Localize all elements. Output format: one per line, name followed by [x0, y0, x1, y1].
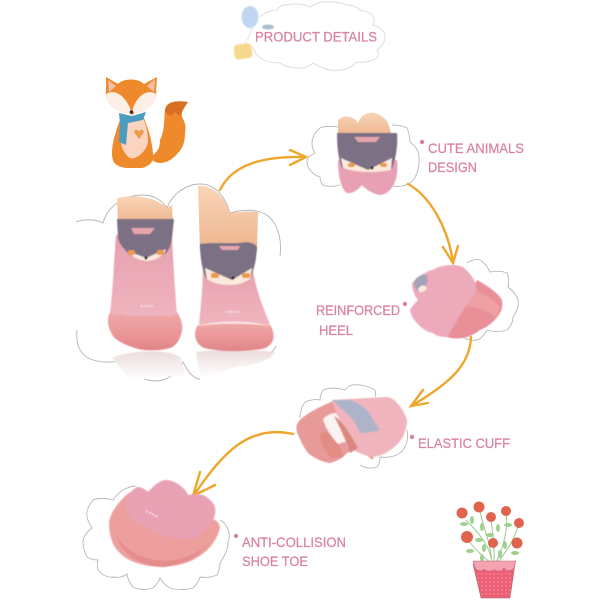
flowers	[456, 502, 524, 548]
bullet	[420, 140, 424, 144]
label text: REINFORCED	[316, 302, 400, 318]
right sock cuff	[200, 242, 257, 284]
bullet	[410, 435, 414, 439]
cute animals leg	[338, 113, 392, 136]
heel grey cuff tip	[414, 275, 428, 292]
label text: ANTI-COLLISION	[242, 534, 346, 550]
fox head	[106, 77, 157, 115]
icon: flower pot	[456, 502, 524, 598]
callout: elastic cuff	[410, 435, 510, 451]
callout: cute animals design: DESIGN	[428, 159, 477, 175]
right sole	[195, 322, 274, 351]
left sole	[108, 312, 182, 350]
arrow: cute animals to heel	[408, 184, 458, 263]
flower pot body	[473, 564, 515, 598]
left sock	[110, 235, 177, 316]
toe cloud outline	[83, 486, 229, 590]
label text: CUTE ANIMALS	[428, 140, 524, 156]
cute animals cloud outline	[307, 125, 419, 186]
toe rubber cap	[109, 480, 220, 567]
icon: balloon and gift	[233, 6, 274, 60]
fox heart	[134, 130, 144, 139]
panel: main photo cloud with both shoes	[76, 184, 280, 381]
label text: ELASTIC CUFF	[418, 435, 510, 451]
callout: reinforced heel: HEEL	[319, 322, 353, 338]
cute animals sock	[337, 133, 397, 195]
right leg	[198, 186, 258, 250]
cuff shoe	[296, 397, 407, 463]
left shoe	[108, 219, 182, 350]
reflections	[112, 350, 275, 380]
cuff fabric	[332, 397, 407, 457]
left sock cuff	[117, 219, 174, 260]
heel fabric	[410, 265, 477, 337]
heel cloud outline	[463, 260, 518, 340]
left leg	[117, 196, 173, 224]
cuff rubber ring	[296, 401, 373, 463]
toe knit fabric	[126, 480, 215, 539]
fox body	[112, 118, 153, 168]
panel: anti-collision toe detail	[83, 480, 229, 590]
heel rubber	[447, 280, 502, 338]
cuff cloud outline	[300, 385, 408, 468]
right sock	[199, 262, 270, 324]
panel: reinforced heel detail	[410, 260, 518, 340]
bullet	[403, 302, 407, 306]
callout: anti-collision shoe toe	[234, 534, 346, 569]
bullet	[234, 534, 238, 538]
right shoe	[195, 242, 274, 351]
callout: reinforced heel	[316, 302, 407, 338]
panel: elastic cuff detail	[296, 385, 408, 468]
fox tail	[150, 101, 188, 163]
arrow: elastic cuff to toe	[193, 432, 293, 496]
main cloud outline	[76, 184, 280, 381]
pot rim	[473, 561, 516, 571]
fox scarf	[119, 112, 146, 145]
callout: cute animals design	[420, 140, 524, 175]
cuff grey animal face	[332, 400, 380, 433]
plant stems and leaves	[460, 510, 519, 562]
arrow: main photo to cute animals	[220, 150, 306, 190]
arrow: heel to elastic cuff	[411, 337, 471, 406]
panel: cute animals design detail	[307, 113, 419, 195]
title cloud outline	[253, 2, 385, 70]
callout: anti-collision shoe toe: SHOE TOE	[242, 553, 308, 569]
cuff opening	[323, 413, 348, 444]
icon: fox	[105, 77, 188, 168]
heel shoe	[410, 265, 502, 338]
title text: PRODUCT DETAILS	[255, 28, 377, 44]
title cloud: product details	[233, 2, 385, 70]
